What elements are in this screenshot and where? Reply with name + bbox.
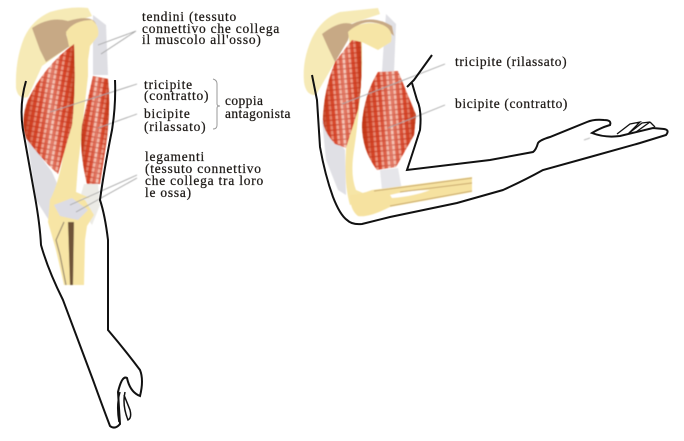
left hand fingers xyxy=(118,392,131,422)
label: bicipite contratto: bicipite (contratto) xyxy=(455,96,568,111)
label: tricipite contratto: tricipite xyxy=(144,77,193,92)
label: legamenti: che collega tra loro xyxy=(145,173,264,188)
label: tendini line 3: il muscolo all'osso) xyxy=(142,32,262,47)
label: coppia antagonista: antagonista xyxy=(225,106,291,121)
left arm anatomy xyxy=(16,8,137,285)
bracket xyxy=(213,79,220,129)
label: tendini: tendini (tessuto xyxy=(142,9,237,24)
label: legamenti: legamenti xyxy=(145,149,205,164)
label: tendini line 2: connettivo che collega xyxy=(142,21,280,36)
label: tricipite contratto: (contratto) xyxy=(144,88,209,103)
right arm: flexed xyxy=(304,8,668,224)
right hand fingers xyxy=(617,122,655,134)
label: legamenti: (tessuto connettivo xyxy=(145,161,262,176)
right arm skin outline xyxy=(312,75,668,224)
label: legamenti: le ossa) xyxy=(145,185,192,200)
left arm skin outline xyxy=(22,80,142,428)
label: legamenti xyxy=(145,149,264,200)
label: tricipite rilassato: tricipite (rilassato) xyxy=(455,54,567,69)
label: bicipite rilassato: bicipite xyxy=(144,106,191,121)
label: coppia antagonista xyxy=(225,93,291,121)
label: bicipite rilassato xyxy=(144,106,206,134)
left arm: extended xyxy=(16,8,142,428)
right arm anatomy xyxy=(304,8,590,216)
label: bicipite rilassato: (rilassato) xyxy=(144,119,206,134)
upper arm skin line xyxy=(407,55,432,87)
label: coppia antagonista: coppia xyxy=(225,93,263,108)
label: tricipite contratto xyxy=(144,77,209,103)
